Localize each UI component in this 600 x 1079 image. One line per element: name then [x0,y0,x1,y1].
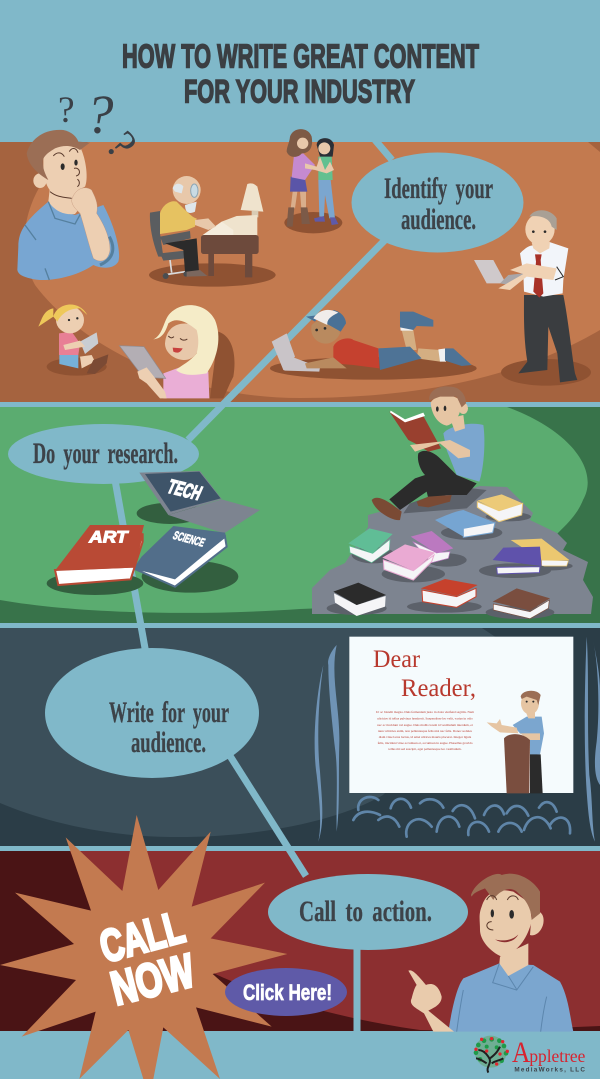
starburst: call now [0,815,287,1079]
question marks: ? [96,123,146,167]
question marks [58,84,146,167]
connecting path line [115,140,392,1031]
group: laptop and subject books [47,471,260,595]
book: green [348,528,395,563]
boy lying with laptop [270,310,477,380]
laptop labelled tech [139,471,260,533]
art book: ART [88,528,130,547]
rock pile [312,486,593,614]
science book [133,526,227,587]
logo wordmark: A [512,1036,531,1069]
book: brown [486,588,554,619]
speech bubble: write for your audience: Write for your [109,696,229,729]
button: click here [225,968,347,1016]
logo wordmark: ppletree [529,1046,585,1066]
starburst: call now: NOW [106,944,200,1016]
businessman with laptop [474,210,591,386]
title [122,38,479,110]
group: thinking man, old man, girl and woman [17,84,276,398]
logo: appletree mediaworks [474,1036,585,1073]
projection screen [349,637,573,793]
logo wordmark [512,1036,585,1073]
letter on screen: nunc ultricies enim, non pellentesque felis nisi nec felis. Donec sodales [378,729,473,734]
button: click here: Click Here! [243,980,332,1005]
audience silhouettes [353,797,570,837]
panel: audience background [0,142,600,402]
panel: call to action background [0,851,600,1031]
group: cinema scene [315,637,600,842]
reading boy [372,386,487,520]
curtains [315,637,600,842]
question marks: ? [86,84,114,145]
speech bubble: write for your audience: audience. [131,726,206,759]
starburst: call now: CALL [94,901,190,972]
title: FOR YOUR INDUSTRY [184,74,415,110]
speech bubble: identify your audience: Identify your [384,172,493,205]
book: gold [511,539,573,571]
letter on screen: Dear [373,646,421,673]
book: red [407,579,482,613]
speech bubble: identify your audience [352,152,524,252]
letter on screen: Reader, [401,675,476,702]
speech bubble: call to action [268,874,468,950]
letter on screen: ultricies id tellus pulvinar hendrerit. Suspendisse leo velit, varius in odio [377,716,473,722]
speech bubble: write for your audience [45,648,259,778]
thinking man [17,130,119,280]
little girl with tablet [38,304,108,376]
speech bubble: identify your audience: audience. [401,203,476,236]
teen girls with phone [284,129,342,233]
book: pink [382,544,445,582]
blonde woman with tablet [119,305,235,398]
book: purple [411,531,467,567]
group: teens, boy and businessman [270,129,591,386]
book: blue [435,510,502,540]
letter on screen: tellus mi sed suscipit, eget pellentesque leo vestibulum. [388,747,462,752]
group: reader and books on the pile [327,386,573,619]
letter on screen [373,646,476,752]
group: pointing man and logo [408,874,585,1073]
art book [55,525,144,585]
speech bubble: call to action: Call to action. [299,895,432,928]
science book: SCIENCE [171,528,207,549]
laptop labelled tech: TECH [164,476,205,505]
letter on screen: diam vitae lacus luctus, id amet ultrices mauris placerat. Integer ligula [379,735,472,740]
letter on screen: Ut ac blandit magna. Duis fermentum justo in dolor eleifend sagittis. Nam [376,710,474,714]
letter on screen: felis, tincidunt vitae accumsan et, accumsan in augue. Phasellus gravida [378,741,473,746]
book: yellow [477,494,531,522]
presenter at podium [487,691,544,793]
logo tree [474,1036,509,1073]
old man at computer [149,176,276,287]
logo wordmark: MediaWorks, LLC [514,1066,585,1073]
book: black [327,583,387,616]
speech bubble: do your research: Do your research. [33,437,178,470]
panel: writing background [0,628,600,846]
speech bubble: do your research [8,424,199,484]
shadows [47,503,238,595]
question marks: ? [58,90,75,131]
book: violet [479,547,551,578]
panel: research background [0,407,600,623]
letter on screen: nec ac tincidunt vel augue. Duis mollis lorem id vestibulum interdum, et [377,723,473,728]
pointing man [408,874,573,1032]
